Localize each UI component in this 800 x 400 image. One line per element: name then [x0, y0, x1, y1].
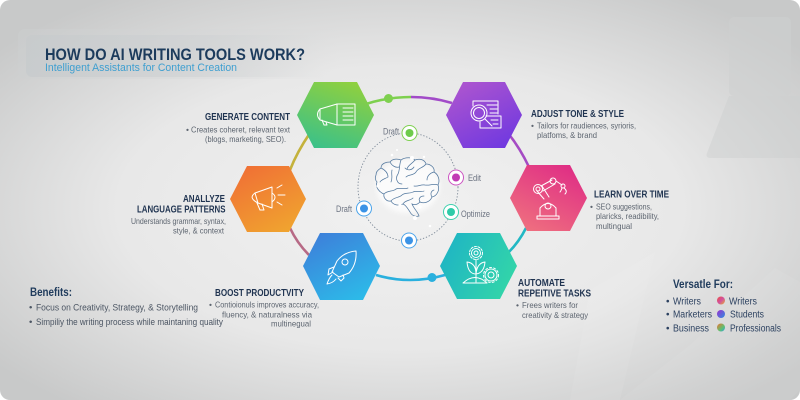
text: learn over time: SEO suggestions, — [596, 202, 652, 212]
versatile for — [666, 277, 781, 334]
text: learn over time: multingual — [596, 221, 632, 231]
text: generate content: (blogs, marketing, SEO). — [205, 134, 286, 144]
text: analyze — [131, 194, 226, 236]
versatile for: Students — [730, 310, 764, 320]
icon: robot arm — [534, 178, 566, 219]
icon: flower and gear — [463, 246, 498, 283]
text: generate content: • — [186, 124, 189, 134]
node: optimize: Optimize — [461, 209, 490, 219]
text: adjust tone — [531, 109, 636, 140]
text: automate: creativity & strategy — [522, 310, 589, 320]
hexagon: learn over time — [510, 165, 587, 231]
text: boost productivity: multinegual — [271, 318, 311, 328]
versatile for: Writers — [729, 296, 757, 308]
title panel — [18, 29, 340, 79]
text: learn over time: plaricks, readibility, — [596, 211, 659, 221]
benefits: Simpiliy the writing process while maintaning quality — [36, 317, 223, 328]
inner dotted cycle — [358, 133, 458, 241]
text: learn over time: • — [590, 202, 593, 212]
text: automate: AUTOMATE — [518, 278, 565, 289]
title: HOW DO AI WRITING TOOLS WORK? — [45, 45, 305, 64]
versatile for: • — [666, 296, 670, 308]
text: boost productivity — [209, 288, 319, 328]
process ring — [290, 94, 529, 282]
text: boost productivity: fluency, & naturalness via — [222, 310, 312, 320]
text: automate: • — [516, 300, 519, 310]
versatile for: • — [666, 310, 670, 320]
versatile for: Versatle For: — [673, 277, 733, 291]
benefits: • — [29, 302, 32, 314]
node: draft top — [383, 126, 417, 140]
hexagon: generate content — [297, 82, 374, 148]
text: boost productivity: • — [209, 300, 212, 310]
text: automate: Frees writers for — [522, 300, 578, 310]
icon: brain — [375, 149, 440, 227]
icon: document magnifier — [471, 101, 501, 128]
versatile for: Writers — [673, 296, 701, 308]
node: draft left: Draft — [336, 204, 352, 214]
text: adjust tone: ADJUST TONE & STYLE — [531, 109, 624, 120]
text: learn over time: LEARN OVER TIME — [594, 190, 669, 200]
benefits: • — [29, 317, 32, 328]
node: draft top: Draft — [383, 126, 399, 136]
node: edit: Edit — [468, 173, 481, 183]
node: edit — [448, 170, 481, 185]
text: adjust tone: Tailors for raudiences, syrioris, — [537, 120, 636, 130]
versatile for: Marketers — [673, 310, 712, 320]
text: generate content: Creates coheret, relevant text — [191, 124, 291, 134]
node: draft left — [336, 201, 372, 216]
hexagon: automate — [440, 233, 517, 299]
versatile for: Professionals — [730, 324, 781, 334]
hexagon: boost productivity — [303, 233, 380, 300]
icon: megaphone with text — [318, 104, 355, 125]
subtitle: Intelligent Assistants for Content Creation — [45, 62, 237, 74]
benefits: Focus on Creativity, Strategy, & Storytelling — [36, 302, 198, 314]
node: bottom — [402, 233, 416, 248]
versatile for: Business — [673, 324, 709, 334]
text: boost productivity: BOOST PRODUCTVITY — [215, 288, 304, 299]
text: analyze: style, & context — [173, 226, 225, 236]
text: generate content — [186, 112, 291, 144]
text: learn over time — [590, 190, 669, 231]
versatile for: • — [666, 324, 670, 334]
node: optimize — [444, 204, 490, 220]
benefits — [29, 285, 223, 328]
text: generate content: GENERATE CONTENT — [205, 112, 291, 123]
icon: megaphone — [252, 185, 285, 210]
icon: rocket — [327, 251, 356, 284]
text: boost productivity: Contioionuls improves accuracy, — [215, 300, 319, 310]
text: adjust tone: platfoms, & brand — [537, 130, 597, 140]
text: adjust tone: • — [531, 120, 534, 130]
text: analyze: LANGUAGE PATTERNS — [137, 204, 226, 216]
hexagon: analyze — [230, 166, 306, 232]
text: analyze: Understands grammar, syntax, — [131, 216, 226, 226]
hexagon: adjust tone — [446, 82, 522, 148]
benefits: Benefits: — [30, 285, 72, 299]
text: analyze: ANALLYZE — [183, 194, 225, 205]
text: automate: REPEITIVE TASKS — [518, 288, 591, 300]
text: automate — [516, 278, 591, 320]
